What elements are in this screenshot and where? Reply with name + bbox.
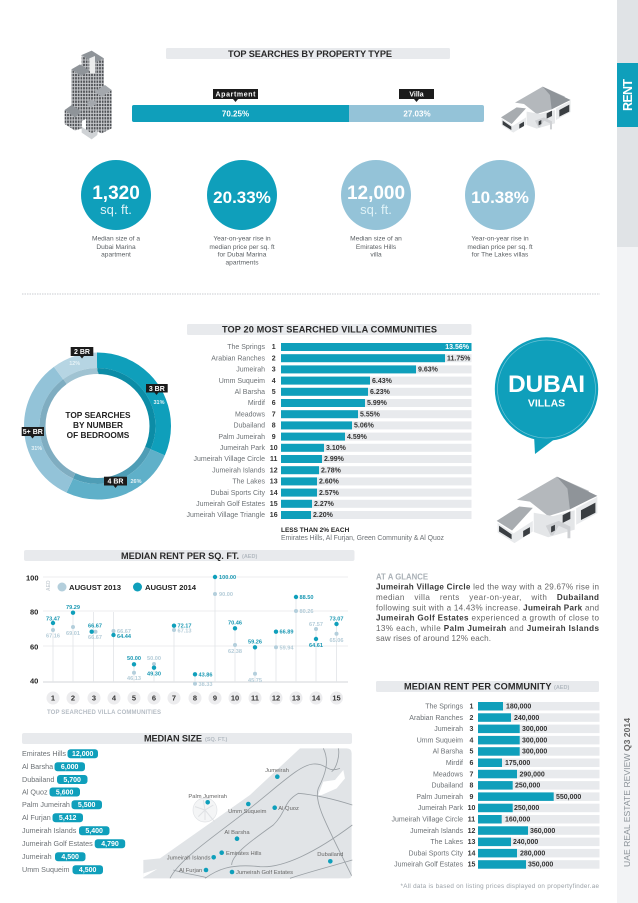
bar chart: median rent per community: 9 (470, 794, 474, 801)
stat: The Lakes price rise: for The Lakes villas (472, 252, 529, 258)
tag: 4 BR (104, 477, 127, 488)
list: median size by community: 5,400 (85, 828, 103, 835)
bar chart: most searched villa communities: 11.75% (447, 355, 471, 362)
badge: Dubai villas speech bubble (495, 337, 598, 454)
map: Dubai communities: Jumeirah Golf Estates (236, 870, 293, 876)
heading: top 20 villa communities: TOP 20 MOST SEARCHED VILLA COMMUNITIES (222, 325, 437, 335)
sidebar (617, 0, 638, 903)
dot plot: median rent per sq ft: 38.33 (198, 682, 212, 688)
map: Dubai communities: Jumeirah (265, 768, 289, 774)
bar chart: median rent per community: Dubai Sports City (409, 850, 463, 857)
axis caption: TOP SEARCHED VILLA COMMUNITIES (47, 710, 161, 716)
text block: at a glance: 13% each, while Palm Jumeirah and Jumeirah Islands (376, 624, 599, 633)
bar chart: median rent per community: 350,000 (528, 862, 553, 869)
list: median size by community: Al Quoz (22, 788, 48, 796)
donut title (65, 410, 131, 440)
bar chart: median rent per community: Jumeirah Golf Estates (394, 862, 463, 869)
text block: at a glance (376, 572, 599, 643)
bar chart: most searched villa communities: 1 (272, 344, 276, 351)
stat: The Lakes price rise: median price per sq. ft (467, 244, 533, 251)
list: median size by community: Dubailand (22, 775, 54, 784)
bar chart: most searched villa communities: 2.57% (319, 490, 340, 497)
bar chart: median rent per community: 13 (468, 839, 475, 846)
bar chart: most searched villa communities: Meadows (235, 411, 265, 418)
bar chart: most searched villa communities: 2.27% (314, 501, 335, 508)
bar chart: median rent per community: 290,000 (520, 771, 545, 778)
stat: Emirates Hills villa size: sq. ft. (360, 202, 392, 217)
donut chart: searches by number of bedrooms: 26% (130, 479, 142, 485)
list: median size by community: Umm Suqueim (22, 865, 70, 874)
map: Dubai communities: Al Barsha (224, 830, 250, 836)
heading: median rent per community: (AED) (554, 685, 569, 691)
bar chart: median rent per community: 550,000 (556, 794, 581, 801)
x axis: community numbers (46, 692, 343, 704)
donut chart: searches by number of bedrooms (31, 360, 165, 492)
bar chart: most searched villa communities: 4 (272, 378, 276, 385)
x axis: community numbers: 14 (312, 694, 321, 703)
stat: Emirates Hills villa size: 12,000 (347, 183, 405, 204)
list: median size by community: Jumeirah Golf Estates (22, 839, 93, 848)
dot plot: median rent per sq ft: 67.16 (46, 634, 60, 640)
x axis: community numbers: 8 (193, 694, 197, 703)
bar chart: most searched villa communities: Jumeirah Village Circle (194, 456, 265, 463)
bar chart: median rent per community: 160,000 (505, 816, 530, 824)
bar chart: median rent per community: 15 (468, 862, 475, 869)
bar chart: most searched villa communities: Umm Suqueim (219, 378, 265, 385)
bar chart: most searched villa communities: 3.10% (326, 445, 347, 452)
bar chart: median rent per community: 5 (470, 749, 474, 756)
dot plot: median rent per sq ft: 69.01 (66, 631, 80, 637)
bar chart: median rent per community: 11 (468, 816, 475, 824)
list: median size by community: 4,500 (61, 854, 79, 861)
tag: 5+ BR (22, 427, 44, 438)
map: Dubai communities: Palm Jumeirah (188, 794, 227, 800)
dot plot: median rent per sq ft: 73.07 (330, 616, 344, 622)
bar chart: most searched villa communities: 2.99% (324, 456, 345, 463)
donut chart: searches by number of bedrooms: 12% (69, 361, 80, 367)
bar chart: most searched villa communities: 5.06% (354, 423, 375, 430)
dot plot: median rent per sq ft: 88.50 (300, 595, 314, 601)
text block: at a glance: median villa rents year-on-year, with Dubailand (376, 593, 599, 602)
bar chart: median rent per community: 1 (470, 704, 474, 710)
x axis: community numbers: 13 (292, 694, 300, 703)
x axis: community numbers: 4 (112, 694, 117, 703)
bar chart: most searched villa communities: 9 (272, 434, 276, 441)
bar chart: median rent per community: 175,000 (505, 760, 530, 767)
bar chart: median rent per community: Palm Jumeirah (416, 794, 463, 801)
dot plot: median rent per sq ft: 65.06 (330, 638, 344, 644)
bar chart: most searched villa communities: Arabian Ranches (211, 355, 265, 362)
bar chart: most searched villa communities: 5.99% (367, 400, 388, 407)
stat: Dubai Marina price rise (207, 160, 277, 266)
bar chart: median rent per community: 300,000 (522, 737, 547, 744)
tag: 3 BR: 3 BR (149, 386, 165, 393)
x axis: community numbers: 7 (172, 694, 176, 703)
heading: top 20 villa communities (187, 324, 472, 335)
bar chart: most searched villa communities: 2.60% (319, 479, 340, 486)
stat: Dubai Marina price rise: apartments (226, 260, 259, 266)
bar chart: most searched villa communities: 13.56% (445, 344, 470, 351)
bar chart: median rent per community: 10 (468, 805, 475, 812)
bar chart: median rent per community: 280,000 (520, 850, 545, 857)
sidebar tab: RENT: RENT (621, 79, 635, 111)
x axis: community numbers: 10 (231, 694, 239, 703)
bar chart: most searched villa communities: 7 (272, 411, 276, 418)
stat: Emirates Hills villa size: Median size of an (350, 236, 402, 242)
legend: August 2013 and August 2014 (58, 582, 197, 592)
dot plot: median rent per sq ft: AED (46, 580, 52, 591)
dot plot: median rent per sq ft: 80 (30, 608, 38, 616)
bar chart: most searched villa communities: The Lakes (232, 479, 265, 486)
x axis: community numbers: 15 (332, 694, 341, 703)
list: median size by community: 6,000 (61, 764, 79, 771)
dot plot: median rent per sq ft: 46.13 (127, 676, 141, 682)
bar chart: median rent per community: Al Barsha (433, 749, 463, 756)
x axis: community numbers: 12 (272, 694, 280, 703)
bar chart: most searched villa communities: 10 (270, 445, 278, 452)
dot plot: median rent per sq ft: 50.00 (147, 656, 161, 662)
sidebar label: report name: UAE REAL ESTATE REVIEW Q3 2014 (622, 718, 632, 867)
bar: apartment vs villa share (132, 105, 484, 122)
list: median size by community: Emirates Hills (22, 749, 66, 758)
bar chart: median rent per community: 3 (470, 726, 474, 733)
x axis: community numbers: 11 (251, 694, 259, 703)
bar chart: most searched villa communities: 2.78% (321, 467, 342, 474)
legend: August 2013 and August 2014: AUGUST 2014 (145, 583, 197, 592)
dot plot: median rent per sq ft: 59.94 (280, 646, 294, 652)
x axis: community numbers: 3 (92, 694, 96, 703)
bar chart: median rent per community: 250,000 (514, 805, 539, 812)
dot plot: median rent per sq ft: 67.57 (309, 622, 323, 628)
tag: 2 BR (71, 347, 93, 358)
icon: apartment towers (65, 51, 112, 139)
dot plot: median rent per sq ft: 49.30 (147, 672, 161, 678)
x axis: community numbers: 6 (152, 694, 156, 703)
bar chart: most searched villa communities: Dubailand (233, 423, 265, 430)
bar chart: most searched villa communities: 2 (272, 355, 276, 362)
x axis: community numbers: 2 (71, 694, 75, 703)
heading: median size (22, 733, 352, 744)
map: Dubai communities: Umm Suqueim (228, 809, 267, 815)
bar chart: median rent per community: Mirdif (446, 760, 463, 767)
bar chart: most searched villa communities: Jumeirah Islands (212, 467, 265, 474)
dot plot: median rent per sq ft: 100.00 (219, 575, 236, 581)
tag: villa: Villa (409, 92, 424, 99)
bar chart: most searched villa communities: 13 (270, 479, 278, 486)
dot plot: median rent per sq ft: 70.46 (228, 620, 242, 626)
x axis: community numbers: 1 (51, 694, 55, 703)
dot plot: median rent per sq ft: 66.89 (280, 630, 294, 636)
dot plot: median rent per sq ft: 59.26 (248, 640, 262, 646)
list: median size by community: 5,700 (63, 777, 81, 784)
dot plot: median rent per sq ft (26, 574, 348, 688)
stat: The Lakes price rise: Year-on-year rise in (471, 236, 529, 242)
dot plot: median rent per sq ft: 60 (30, 642, 38, 652)
list: median size by community: Al Barsha (22, 762, 53, 771)
dot plot: median rent per sq ft: 66.67 (88, 624, 102, 630)
bar: apartment vs villa share: 70.25% (222, 110, 249, 118)
bar chart: median rent per community (392, 702, 600, 869)
bar chart: most searched villa communities: 5 (272, 389, 276, 396)
dot plot: median rent per sq ft: 62.38 (228, 649, 242, 655)
stat: Dubai Marina apartment size: 1,320 (92, 183, 140, 204)
x axis: community numbers: 5 (132, 694, 136, 703)
list: median size by community: Palm Jumeirah (22, 800, 70, 809)
stat: Emirates Hills villa size: villa (370, 252, 382, 258)
list: median size by community: Jumeirah Islands (22, 826, 77, 835)
bar chart: median rent per community: 240,000 (513, 839, 538, 846)
stat: Dubai Marina apartment size: apartment (101, 252, 131, 258)
dot plot: median rent per sq ft: 79.29 (66, 605, 80, 611)
map: Dubai communities: Emirates Hills (226, 851, 262, 857)
donut chart: searches by number of bedrooms: 31% (153, 400, 165, 406)
bar chart: most searched villa communities: 6 (272, 400, 276, 407)
heading: top searches by property type (166, 48, 450, 59)
stat: Dubai Marina apartment size: sq. ft. (100, 202, 132, 217)
bar chart: median rent per community: Umm Suqueim (417, 737, 463, 744)
donut title: TOP SEARCHES (65, 410, 131, 420)
legend: August 2013 and August 2014: AUGUST 2013 (69, 583, 121, 592)
dot plot: median rent per sq ft: 72.17 (178, 624, 192, 630)
stat: Dubai Marina apartment size: Median size of a (92, 236, 140, 242)
list: median size by community: 4,500 (79, 867, 97, 874)
map: Dubai communities: Dubailand (317, 852, 343, 858)
bar chart: most searched villa communities: Dubai Sports City (211, 490, 265, 497)
map: Dubai communities: Al Quoz (278, 806, 299, 812)
dot plot: median rent per sq ft: 90.00 (219, 592, 233, 598)
bar chart: most searched villa communities: 14 (270, 490, 278, 497)
icon: villa large (497, 477, 597, 543)
map: Dubai communities: Jumeirah Islands (167, 856, 211, 862)
heading: median size: MEDIAN SIZE (144, 734, 202, 744)
bar chart: most searched villa communities: 3 (272, 367, 276, 374)
bar chart: median rent per community: The Lakes (430, 839, 463, 846)
bar chart: most searched villa communities: 16 (270, 512, 278, 519)
bar chart: most searched villa communities: 9.63% (418, 367, 439, 374)
stat: Dubai Marina price rise: median price per sq. ft (209, 244, 275, 251)
bar chart: median rent per community: Dubailand (431, 783, 463, 790)
list: median size by community: Jumeirah (22, 852, 52, 861)
dot plot: median rent per sq ft: 66.67 (117, 629, 131, 635)
x axis: community numbers: 9 (213, 694, 217, 703)
bar chart: median rent per community: 6 (470, 760, 474, 767)
bar chart: median rent per community: Arabian Ranches (409, 715, 463, 722)
bar chart: median rent per community: 360,000 (530, 828, 555, 835)
bar chart: most searched villa communities: 6.23% (370, 389, 391, 396)
bar chart: most searched villa communities: The Springs (227, 344, 265, 351)
text block: at a glance: following suit with a 14.43% increase. Jumeirah Park and (376, 604, 599, 612)
heading: top searches by property type: TOP SEARCHES BY PROPERTY TYPE (228, 49, 392, 59)
badge: Dubai villas speech bubble: DUBAI (508, 371, 585, 398)
list: median size by community: 5,600 (56, 790, 74, 796)
bar chart: most searched villa communities: 2.20% (313, 512, 334, 519)
bar chart: median rent per community: Jumeirah Islands (410, 828, 463, 835)
stat: Emirates Hills villa size: Emirates Hills (356, 244, 397, 251)
dot plot: median rent per sq ft: 67.13 (178, 628, 192, 634)
bar chart: most searched villa communities: 15 (270, 501, 278, 508)
bar: apartment vs villa share: 27.03% (403, 110, 431, 118)
bar chart: median rent per community: 240,000 (514, 715, 539, 722)
text block: at a glance: saw rises of around 12% each. (376, 634, 491, 643)
bar chart: most searched villa communities: 5.55% (360, 411, 381, 418)
donut title: BY NUMBER (73, 420, 123, 430)
list: median size by community: 5,500 (78, 802, 96, 809)
bar chart: median rent per community: 2 (470, 715, 474, 722)
heading: median rent per sq ft (24, 550, 354, 561)
bar chart: median rent per community: Jumeirah Park (418, 805, 463, 812)
bar chart: most searched villa communities: Jumeirah Village Triangle (187, 512, 265, 519)
heading: median rent per community: MEDIAN RENT PER COMMUNITY (404, 682, 552, 692)
stat: Dubai Marina apartment size: Dubai Marina (96, 244, 136, 251)
tag: apartment: Apartment (216, 92, 256, 99)
dot plot: median rent per sq ft: 64.44 (117, 634, 132, 640)
map: Dubai communities: Al Furjan (179, 868, 202, 874)
dot plot: median rent per sq ft: 40 (30, 676, 38, 686)
text block: at a glance: Jumeirah Golf Estates experienced a growth of close to (376, 614, 599, 623)
heading: median size: (SQ. FT.) (205, 737, 227, 743)
dot plot: median rent per sq ft: 50.00 (127, 656, 141, 662)
bar chart: most searched villa communities: Mirdif (248, 400, 265, 407)
tag: 5+ BR: 5+ BR (23, 429, 43, 436)
stat: The Lakes price rise: 10.38% (471, 188, 529, 207)
bar chart: most searched villa communities: Jumeirah Park (220, 445, 265, 452)
bar chart: most searched villa communities: 4.59% (347, 434, 368, 441)
bar chart: most searched villa communities: Jumeirah Golf Estates (196, 501, 265, 508)
bar chart: most searched villa communities: Jumeirah (236, 367, 265, 374)
donut chart: searches by number of bedrooms: 31% (31, 446, 42, 452)
bar chart: median rent per community: 4 (470, 737, 474, 744)
dot plot: median rent per sq ft: 80.26 (300, 609, 314, 615)
bar chart: median rent per community: 8 (470, 783, 474, 790)
sidebar tab: RENT (617, 63, 638, 127)
dot plot: median rent per sq ft: 66.67 (88, 635, 102, 641)
badge: Dubai villas speech bubble: VILLAS (528, 398, 565, 410)
note: less than 2% each: LESS THAN 2% EACH (281, 527, 350, 534)
dot plot: median rent per sq ft: 100 (26, 574, 39, 582)
text block: at a glance: Jumeirah Village Circle led the way with a 29.67% rise in (376, 583, 599, 592)
icon: villa small (501, 87, 571, 133)
bar chart: median rent per community: 14 (468, 850, 475, 857)
bar chart: median rent per community: 180,000 (506, 704, 531, 710)
heading: median rent per sq ft: (AED) (242, 554, 257, 560)
list: median size by community: 5,412 (59, 815, 77, 822)
donut title: OF BEDROOMS (67, 430, 130, 440)
bar chart: median rent per community: The Springs (425, 704, 463, 710)
stat: Dubai Marina price rise: Year-on-year rise in (213, 236, 271, 242)
dot plot: median rent per sq ft: 43.86 (198, 672, 212, 678)
footnote: *All data is based on listing prices displayed on propertyfinder.ae (400, 883, 599, 890)
bar chart: median rent per community: Jumeirah Village Circle (392, 816, 463, 824)
stat: Dubai Marina apartment size (81, 160, 151, 258)
bar chart: most searched villa communities: 6.43% (372, 378, 393, 385)
heading: median rent per sq ft: MEDIAN RENT PER SQ. FT. (121, 551, 239, 561)
tag: 3 BR (146, 384, 168, 395)
stat: Emirates Hills villa size (341, 160, 411, 258)
bar chart: most searched villa communities: 8 (272, 423, 276, 430)
bar chart: median rent per community: Jumeirah (434, 726, 463, 733)
bar chart: most searched villa communities (187, 343, 472, 519)
list: median size by community: 12,000 (72, 751, 94, 758)
list: median size by community (22, 749, 125, 874)
dot plot: median rent per sq ft: 45.75 (248, 678, 262, 684)
note: less than 2% each: Emirates Hills, Al Furjan, Green Community & Al Quoz (281, 535, 445, 542)
tag: 4 BR: 4 BR (108, 478, 123, 486)
bar chart: median rent per community: 12 (468, 828, 475, 835)
bar chart: median rent per community: 7 (470, 771, 474, 778)
map: Dubai communities (143, 748, 352, 878)
tag: apartment (213, 89, 258, 102)
bar chart: most searched villa communities: Palm Jumeirah (218, 434, 265, 441)
bar chart: median rent per community: Meadows (433, 771, 463, 778)
list: median size by community: 4,790 (101, 841, 119, 848)
note: less than 2% each (281, 527, 445, 542)
bar chart: most searched villa communities: 12 (270, 467, 278, 474)
dot plot: median rent per sq ft: 64.61 (309, 643, 323, 649)
tag: villa (399, 89, 434, 102)
heading: median rent per community (376, 681, 599, 692)
bar chart: most searched villa communities: 11 (270, 456, 278, 463)
tag: 2 BR: 2 BR (74, 349, 90, 356)
dot plot: median rent per sq ft: 73.47 (46, 616, 60, 622)
stat: The Lakes price rise (465, 160, 535, 258)
bar chart: median rent per community: 250,000 (515, 783, 540, 790)
text block: at a glance: AT A GLANCE (376, 572, 428, 582)
bar chart: median rent per community: 300,000 (522, 749, 547, 756)
stat: Dubai Marina price rise: for Dubai Marina (218, 252, 267, 258)
bar chart: median rent per community: 300,000 (522, 726, 547, 733)
list: median size by community: Al Furjan (22, 813, 51, 822)
stat: Dubai Marina price rise: 20.33% (213, 188, 271, 207)
bar chart: most searched villa communities: Al Barsha (235, 389, 265, 396)
